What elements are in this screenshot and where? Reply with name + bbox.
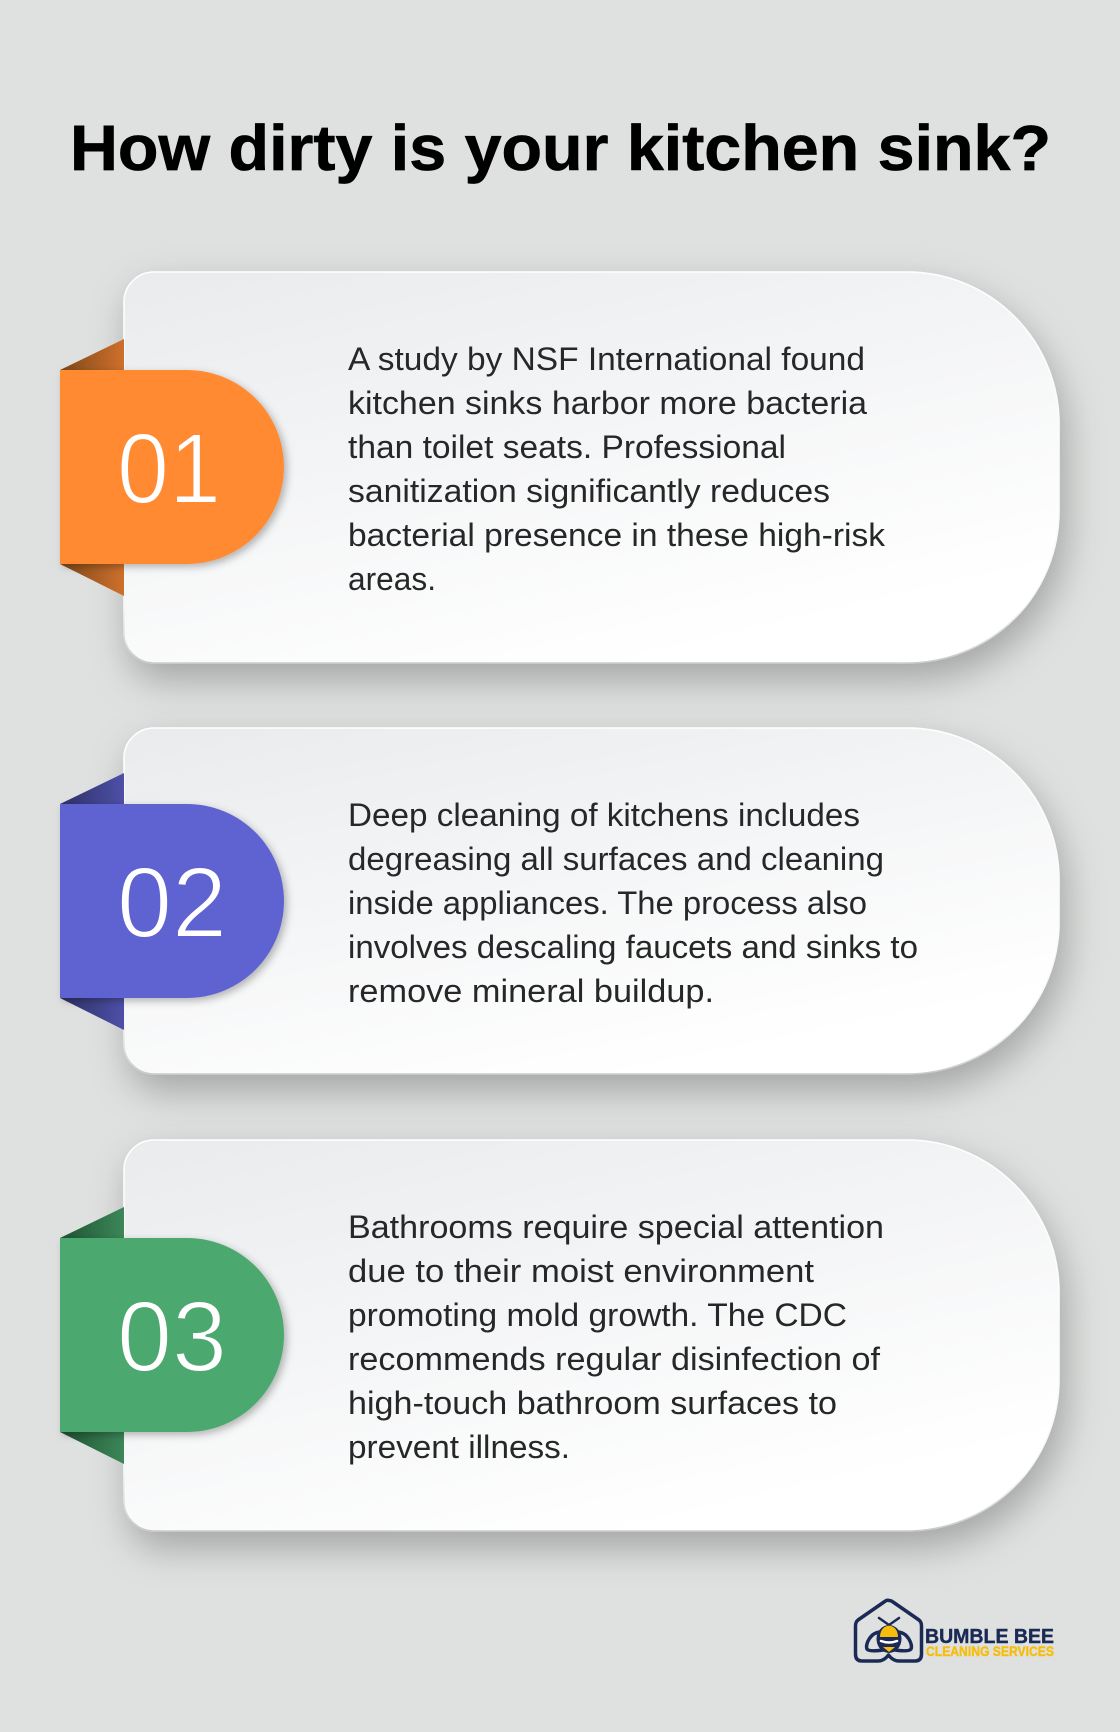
number badge 02: [60, 804, 284, 998]
text: step 03: Bathrooms require special attention: [348, 1209, 884, 1245]
icon: house outline: [856, 1600, 922, 1661]
card 03: [124, 1140, 1059, 1531]
text: step 02: Deep cleaning of kitchens includes: [348, 797, 860, 833]
card 02: [124, 728, 1059, 1074]
text: step 01: areas.: [348, 561, 436, 597]
logo: Bumble Bee Cleaning Services: [856, 1600, 1054, 1661]
text: step 01: bacterial presence in these high-risk: [348, 517, 886, 553]
logo tagline: CLEANING SERVICES: [926, 1644, 1054, 1659]
card 01: [124, 272, 1059, 663]
title: How dirty is your kitchen sink?: [70, 112, 1051, 184]
ribbon fold top 02: [60, 773, 124, 804]
text: step 02: inside appliances. The process also: [348, 885, 867, 921]
number badge 01: [60, 370, 284, 564]
number badge 03: [60, 1238, 284, 1432]
text: step 03: recommends regular disinfection of: [348, 1341, 880, 1377]
number 03: 03: [117, 1281, 227, 1393]
panel: step 02: [60, 728, 1059, 1074]
text: step 02: degreasing all surfaces and cleaning: [348, 841, 884, 877]
text: step 01: than toilet seats. Professional: [348, 429, 786, 465]
number 02: 02: [117, 847, 227, 959]
panel: step 03: [60, 1140, 1059, 1531]
text: step 02: [348, 797, 918, 1009]
panel: step 01: [60, 272, 1059, 663]
text: step 03: prevent illness.: [348, 1429, 570, 1465]
text: step 03: due to their moist environment: [348, 1253, 814, 1289]
text: step 01: sanitization significantly reduces: [348, 473, 830, 509]
text: step 03: [348, 1209, 884, 1465]
text: step 01: A study by NSF International found: [348, 341, 865, 377]
ribbon fold bottom 03: [60, 1432, 124, 1464]
ribbon fold top 01: [60, 339, 124, 370]
ribbon fold bottom 02: [60, 998, 124, 1030]
text: step 03: high-touch bathroom surfaces to: [348, 1385, 837, 1421]
text: step 02: remove mineral buildup.: [348, 973, 714, 1009]
text: step 02: involves descaling faucets and sinks to: [348, 929, 918, 965]
number 01: 01: [117, 413, 221, 525]
logo wordmark: BUMBLE BEE: [925, 1626, 1054, 1648]
text: step 03: promoting mold growth. The CDC: [348, 1297, 847, 1333]
text: step 01: [348, 341, 886, 597]
text: step 01: kitchen sinks harbor more bacteria: [348, 385, 867, 421]
ribbon fold bottom 01: [60, 564, 124, 596]
icon: bee: [867, 1618, 911, 1653]
ribbon fold top 03: [60, 1207, 124, 1238]
